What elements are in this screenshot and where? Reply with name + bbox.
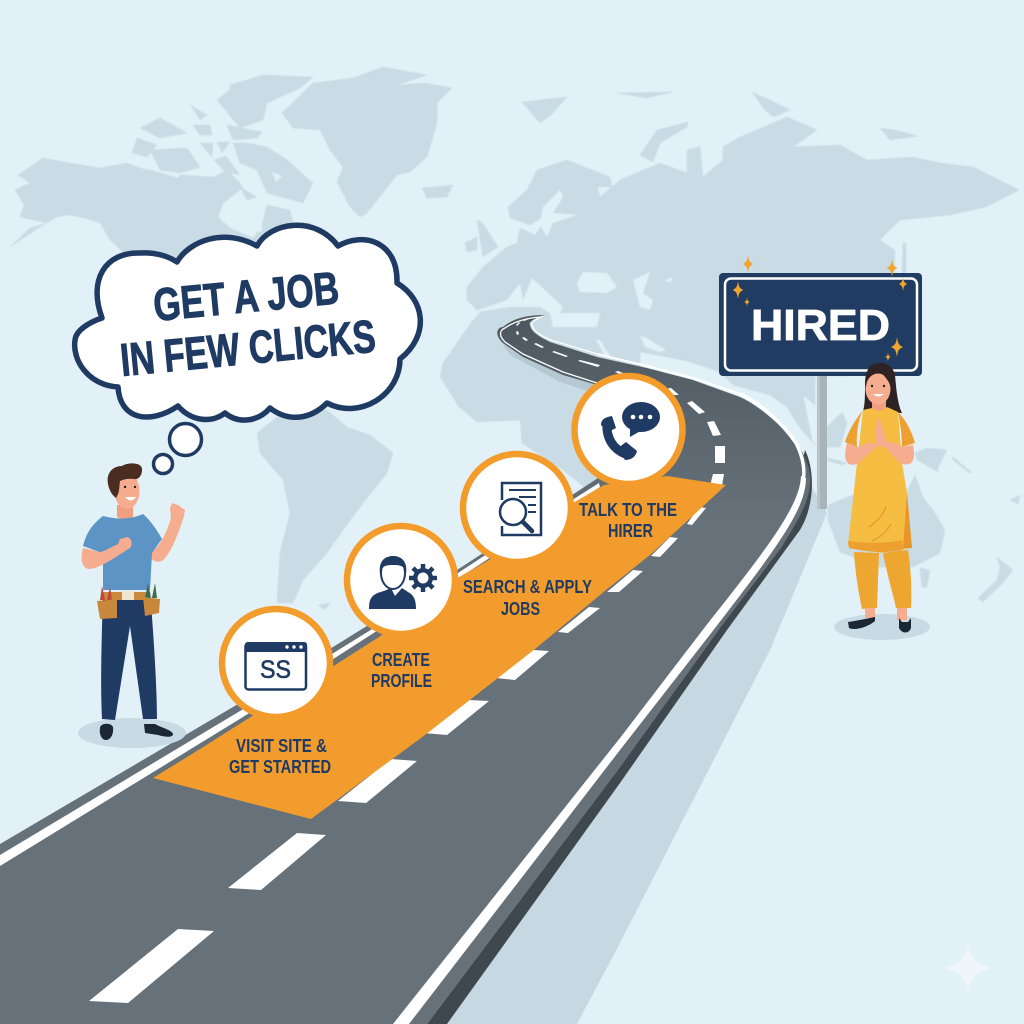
tool belt <box>103 592 150 600</box>
neck <box>872 400 886 415</box>
road far-side shadow <box>497 335 600 395</box>
sleeves <box>845 410 863 447</box>
man with tool belt <box>78 463 186 748</box>
road shadow band <box>440 480 827 1024</box>
right arm <box>148 503 185 562</box>
head <box>114 473 140 509</box>
icon: phone and speech bubble <box>601 402 660 460</box>
feet and shoes <box>865 608 907 620</box>
sign text: HIRED <box>751 301 890 350</box>
step 4: talk to hirer <box>574 376 682 484</box>
thought cloud <box>75 225 420 474</box>
road centre dashes <box>89 318 725 1003</box>
arms and hands <box>845 418 914 465</box>
cloud headline <box>118 261 378 386</box>
label: visit site: VISIT SITE & <box>236 736 327 756</box>
label: create profile <box>371 650 432 691</box>
icon: document with magnifier <box>500 483 541 535</box>
label: search and apply <box>463 577 592 619</box>
label: create profile: CREATE <box>372 650 430 670</box>
orange step path <box>153 476 726 819</box>
cloud headline: GET A JOB <box>151 261 341 331</box>
road <box>0 315 812 1024</box>
shoes <box>100 724 113 740</box>
step 2: create profile <box>347 526 455 634</box>
shirt <box>83 514 162 590</box>
label: create profile: PROFILE <box>371 671 432 691</box>
label: talk to hirer <box>579 500 677 541</box>
road edge lines <box>0 483 600 866</box>
thought bubbles <box>154 424 202 474</box>
step 1: visit site <box>222 609 330 717</box>
left arm <box>82 537 132 569</box>
label: search and apply: SEARCH & APPLY <box>463 577 592 597</box>
cloud headline: IN FEW CLICKS <box>118 310 378 386</box>
pole <box>817 376 827 509</box>
sea cut-outs <box>222 152 715 357</box>
sparkles <box>733 255 907 362</box>
label: talk to hirer: HIRER <box>608 521 653 541</box>
label: visit site: GET STARTED <box>229 757 331 777</box>
icon: person with gear <box>369 556 437 609</box>
world map background <box>10 67 1020 610</box>
legs <box>101 592 157 720</box>
woman in yellow <box>834 363 930 640</box>
label: talk to hirer: TALK TO THE <box>579 500 677 520</box>
kurta <box>848 407 912 553</box>
neck <box>117 505 133 520</box>
watermark sparkle <box>943 942 993 993</box>
hired sign <box>719 255 922 376</box>
face <box>866 374 890 404</box>
label: search and apply: JOBS <box>501 599 540 619</box>
trousers <box>854 552 879 609</box>
label: visit site <box>229 736 331 777</box>
icon: browser window: SS <box>260 656 291 684</box>
hair <box>863 363 902 413</box>
step 3: search and apply <box>463 454 571 562</box>
